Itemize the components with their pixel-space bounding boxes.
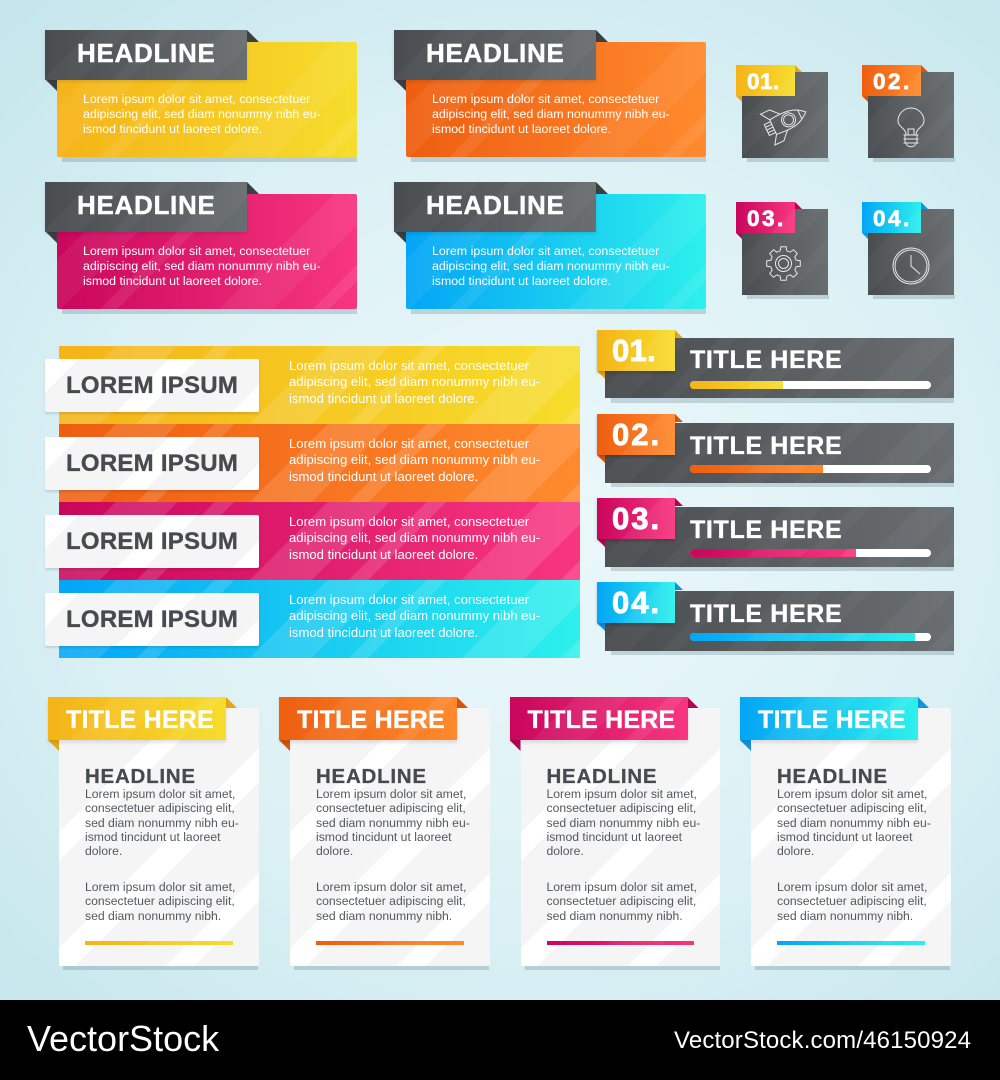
text: pink card first paragraph [546,787,700,858]
heading: cyan card headline: HEADLINE [777,765,888,788]
text: yellow card first paragraph [85,787,239,858]
text: pink card second paragraph [546,880,697,923]
panel: bottom card yellow [48,697,259,970]
text: yellow row body [289,358,540,406]
footer band [0,1000,1000,1080]
text: yellow card body: adipiscing elit, sed diam nonummy nibh eu- [83,106,321,120]
text: cyan card first paragraph [777,787,931,858]
text: yellow card second paragraph: sed diam nonummy nibh. [85,909,221,923]
text: orange card second paragraph: Lorem ipsum dolor sit amet, [316,880,466,894]
panel: progress row 03 [596,498,954,571]
text: orange row body: Lorem ipsum dolor sit amet, consectetuer [289,436,529,451]
text: pink card second paragraph: Lorem ipsum dolor sit amet, [546,880,697,894]
text: pink card body: ismod tincidunt ut laoreet dolore. [83,274,262,288]
text: pink row body: ismod tincidunt ut laoreet dolore. [289,547,478,562]
text: yellow card second paragraph [85,880,235,923]
progress fill 02 [690,465,823,473]
icon: light bulb [898,108,924,148]
text: cyan card second paragraph: sed diam nonummy nibh. [777,909,913,923]
heading: title here 03: TITLE HERE [690,516,842,544]
text: yellow card first paragraph: ismod tincidunt ut laoreet [85,830,220,844]
panel: icon tile 04 clock [862,202,955,299]
panel: lorem row yellow [44,346,580,424]
footer logo text: VectorStock [27,1018,219,1059]
number 03: 03. [747,206,786,231]
number 03: 03. [612,500,661,536]
text: cyan card second paragraph: consectetuer adipiscing elit, [777,894,927,908]
text: cyan card first paragraph: consectetuer adipiscing elit, [777,801,927,815]
heading: yellow card headline: HEADLINE [85,765,196,788]
text: pink card second paragraph: sed diam nonummy nibh. [546,909,683,923]
heading: title here 04: TITLE HERE [690,600,842,628]
number 04: 04. [873,206,912,231]
heading: pink card headline: HEADLINE [77,190,216,220]
text: pink card first paragraph: ismod tincidunt ut laoreet [546,830,682,844]
text: pink card first paragraph: consectetuer adipiscing elit, [546,801,696,815]
label: lorem ipsum cyan: LOREM IPSUM [66,606,238,633]
text: pink card body: adipiscing elit, sed diam nonummy nibh eu- [83,258,321,272]
text: cyan row body: adipiscing elit, sed diam nonummy nibh eu- [289,608,540,623]
text: cyan row body: Lorem ipsum dolor sit amet, consectetuer [289,592,529,607]
panel: progress row 04 [596,582,954,655]
text: orange card body: ismod tincidunt ut laoreet dolore. [432,122,611,136]
text: yellow card body [83,92,321,136]
number 01: 01. [747,69,780,94]
heading: cyan card headline: HEADLINE [426,190,564,220]
panel: icon tile 02 light bulb [862,65,955,162]
panel: icon tile 01 rocket [736,65,829,162]
panel: bottom card orange [278,697,490,970]
label: lorem ipsum orange: LOREM IPSUM [66,450,238,477]
heading: cyan card title: TITLE HERE [758,706,906,734]
icon: gear [766,246,801,281]
text: orange card body [432,92,670,136]
text: orange row body [289,436,540,484]
number 02: 02. [873,69,912,94]
text: yellow row body: Lorem ipsum dolor sit amet, consectetuer [289,358,529,373]
text: orange card first paragraph: Lorem ipsum dolor sit amet, [316,787,466,801]
progress track 01 [690,380,931,388]
text: orange card first paragraph [316,787,470,858]
heading: pink card title: TITLE HERE [528,706,675,734]
text: cyan row body: ismod tincidunt ut laoreet dolore. [289,625,478,640]
heading: yellow card headline: HEADLINE [77,38,216,68]
text: yellow card second paragraph: consectetuer adipiscing elit, [85,894,235,908]
text: cyan card second paragraph [777,880,927,923]
text: yellow card body: ismod tincidunt ut laoreet dolore. [83,122,262,136]
text: pink row body [289,514,540,562]
text: orange card first paragraph: dolore. [316,844,353,858]
panel: progress row 02 [596,414,954,487]
icon: rocket [760,109,806,146]
panel: yellow headline card [44,30,357,162]
panel: progress row 01 [596,330,954,403]
text: pink card first paragraph: sed diam nonummy nibh eu- [546,816,700,830]
text: cyan row body [289,592,540,640]
text: yellow card first paragraph: sed diam nonummy nibh eu- [85,816,239,830]
text: pink card second paragraph: consectetuer adipiscing elit, [546,894,696,908]
panel: bottom card cyan [740,697,951,970]
progress track 03 [690,549,931,557]
text: orange card first paragraph: sed diam nonummy nibh eu- [316,816,470,830]
text: cyan card body: ismod tincidunt ut laoreet dolore. [432,274,611,288]
progress track 02 [690,465,931,473]
accent bar yellow [85,941,232,945]
footer image id: VectorStock.com/46150924 [674,1027,971,1054]
text: pink row body: adipiscing elit, sed diam nonummy nibh eu- [289,530,540,545]
text: yellow card first paragraph: dolore. [85,844,122,858]
label: lorem ipsum yellow: LOREM IPSUM [66,372,238,399]
number 01: 01. [612,332,656,368]
panel: icon tile 03 gear [736,202,829,299]
progress track 04 [690,633,931,641]
heading: orange card headline: HEADLINE [316,765,427,788]
text: cyan card first paragraph: ismod tincidunt ut laoreet [777,830,912,844]
accent bar orange [316,941,464,945]
number 04: 04. [612,584,661,620]
text: yellow card first paragraph: consectetuer adipiscing elit, [85,801,235,815]
icon: clock [892,248,930,284]
panel: lorem row orange [44,424,580,502]
text: pink card body: Lorem ipsum dolor sit amet, consectetuer [83,244,310,258]
panel: cyan headline card [394,182,706,314]
text: orange card first paragraph: ismod tincidunt ut laoreet [316,830,452,844]
heading: yellow card title: TITLE HERE [66,706,214,734]
text: cyan card first paragraph: Lorem ipsum dolor sit amet, [777,787,927,801]
text: pink card body [83,244,321,288]
panel: lorem row cyan [44,580,580,658]
text: orange card first paragraph: consectetuer adipiscing elit, [316,801,466,815]
text: cyan card second paragraph: Lorem ipsum dolor sit amet, [777,880,927,894]
text: orange row body: adipiscing elit, sed diam nonummy nibh eu- [289,452,540,467]
panel: orange headline card [394,30,706,162]
text: orange card body: adipiscing elit, sed diam nonummy nibh eu- [432,106,670,120]
text: cyan card body: Lorem ipsum dolor sit amet, consectetuer [432,244,659,258]
progress fill 03 [690,549,856,557]
panel: pink headline card [44,182,357,314]
heading: pink card headline: HEADLINE [546,765,657,788]
text: pink card first paragraph: Lorem ipsum dolor sit amet, [546,787,697,801]
progress fill 01 [690,380,783,388]
text: yellow row body: adipiscing elit, sed diam nonummy nibh eu- [289,374,540,389]
number 02: 02. [612,416,661,452]
heading: title here 02: TITLE HERE [690,432,842,460]
text: pink card first paragraph: dolore. [546,844,584,858]
text: cyan card first paragraph: dolore. [777,844,814,858]
progress fill 04 [690,633,915,641]
text: orange card second paragraph [316,880,466,923]
text: orange card second paragraph: sed diam nonummy nibh. [316,909,452,923]
text: pink row body: Lorem ipsum dolor sit amet, consectetuer [289,514,529,529]
label: lorem ipsum pink: LOREM IPSUM [66,528,238,555]
accent bar pink [546,941,694,945]
accent bar cyan [777,941,924,945]
text: cyan card body: adipiscing elit, sed diam nonummy nibh eu- [432,258,670,272]
text: yellow row body: ismod tincidunt ut laoreet dolore. [289,391,478,406]
panel: bottom card pink [510,697,720,970]
heading: orange card headline: HEADLINE [426,38,564,68]
text: yellow card first paragraph: Lorem ipsum dolor sit amet, [85,787,235,801]
text: orange card second paragraph: consectetuer adipiscing elit, [316,894,466,908]
text: cyan card body [432,244,670,288]
text: orange card body: Lorem ipsum dolor sit amet, consectetuer [432,92,659,106]
text: orange row body: ismod tincidunt ut laoreet dolore. [289,469,478,484]
panel: lorem row pink [44,502,580,580]
text: yellow card body: Lorem ipsum dolor sit amet, consectetuer [83,92,310,106]
heading: orange card title: TITLE HERE [297,706,445,734]
text: cyan card first paragraph: sed diam nonummy nibh eu- [777,816,931,830]
text: yellow card second paragraph: Lorem ipsum dolor sit amet, [85,880,235,894]
heading: title here 01: TITLE HERE [690,346,842,374]
